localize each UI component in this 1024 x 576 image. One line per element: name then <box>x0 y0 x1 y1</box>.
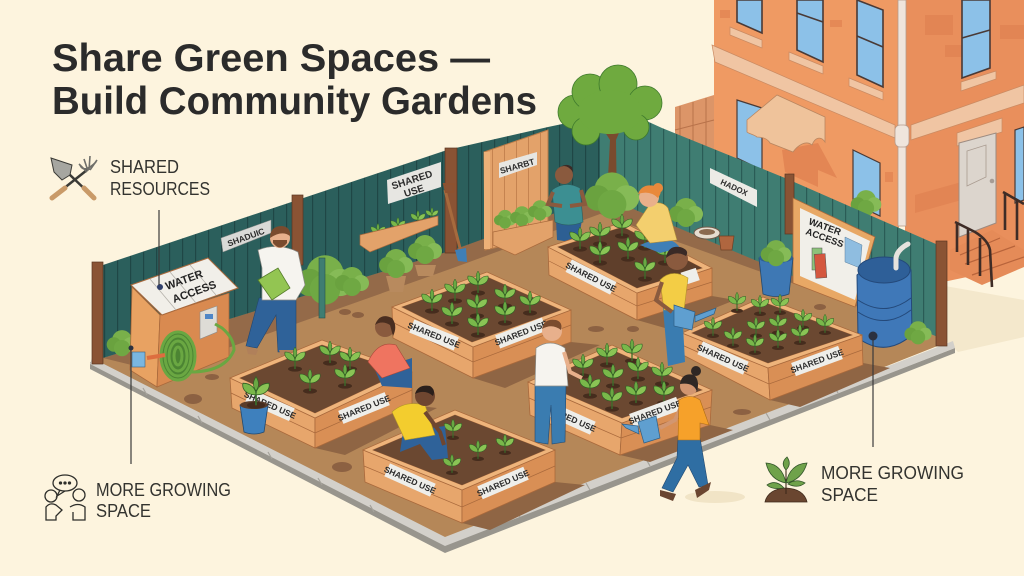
shed right wall <box>157 293 229 387</box>
plants <box>285 347 305 372</box>
caption: shared resources: SHARED <box>110 157 179 177</box>
caption: more growing space left <box>96 480 231 521</box>
jeans <box>662 438 708 492</box>
person: man with bucket <box>246 226 305 356</box>
person: kneeling coral shirt <box>368 316 412 388</box>
large bush <box>296 255 369 305</box>
raised bed: top right <box>548 214 712 320</box>
plant beside barrel <box>904 321 932 344</box>
curb top <box>90 341 955 546</box>
label: SHARED USE <box>627 398 683 426</box>
tree trunk <box>596 112 627 216</box>
sign: shared use on fence: USE <box>403 183 426 200</box>
tap <box>132 352 165 367</box>
icon: trowel and fork <box>51 156 97 198</box>
plant in window <box>851 190 881 216</box>
person: walking orange tee <box>622 366 745 503</box>
shed left wall <box>130 287 160 387</box>
sign: shadufc on fence: SHADUIC <box>226 226 266 249</box>
caption: shared resources: RESOURCES <box>110 179 210 199</box>
leader lines <box>128 210 878 464</box>
caption: more growing space right: MORE GROWING <box>821 463 964 483</box>
title: Share Green Spaces — <box>52 37 490 80</box>
bushes behind bed <box>585 172 703 227</box>
label: SHARED USE <box>383 464 438 496</box>
garden ground <box>92 195 945 541</box>
bowl and pot <box>694 227 734 250</box>
rain barrel <box>857 244 912 347</box>
dark soil along fence base <box>103 195 945 372</box>
raised bed: bottom <box>363 410 555 523</box>
lower windows <box>737 100 1024 216</box>
hose reel <box>161 324 234 380</box>
shed bush <box>107 330 137 356</box>
water access shed <box>107 258 238 387</box>
label: SHARED USE <box>789 347 845 375</box>
brick facade: right <box>905 0 1024 290</box>
tree canopy <box>558 65 662 145</box>
green bucket <box>258 268 290 300</box>
plants <box>573 354 593 379</box>
upper windows <box>737 0 990 87</box>
building ground shadow <box>945 286 1024 352</box>
label: SHARED USE <box>543 402 598 434</box>
shoes <box>660 482 711 501</box>
label: SHARED USE <box>406 320 462 350</box>
raised bed: top middle <box>392 271 571 378</box>
sign: shared use on fence <box>387 162 441 204</box>
leader: more growing space left <box>128 346 134 464</box>
steps <box>950 230 1024 285</box>
sign: shadufc on fence <box>221 220 271 252</box>
notice board: ACCESS <box>804 226 845 250</box>
label <box>681 268 700 285</box>
bed shadows <box>315 296 890 530</box>
tap post <box>319 258 325 318</box>
title: Build Community Gardens <box>52 80 537 123</box>
stair rails <box>955 192 1024 287</box>
title <box>52 37 537 123</box>
door <box>957 118 1002 237</box>
wooden gate panel <box>484 130 548 250</box>
notice board <box>793 198 875 307</box>
curb <box>90 341 955 553</box>
walker shadow <box>685 491 745 503</box>
awning <box>747 95 825 152</box>
water access shed: ACCESS <box>171 279 218 306</box>
label: SHARED USE <box>243 389 298 421</box>
blue pot with seedling <box>240 377 269 434</box>
planter at gate <box>493 200 553 255</box>
wooden gate panel: SHARBT <box>499 156 536 176</box>
cornice band right <box>911 85 1024 140</box>
raised bed: center right <box>528 339 712 455</box>
potted shrubs <box>379 235 442 292</box>
plants <box>422 289 442 314</box>
head <box>680 377 698 395</box>
label: SHARED USE <box>336 393 392 423</box>
person: teal shirt <box>548 165 585 243</box>
sign: hadox <box>710 168 757 207</box>
wall planter <box>360 207 438 252</box>
leader: shared resources <box>158 210 160 285</box>
sign: sharbt <box>499 152 537 178</box>
plants <box>444 419 462 440</box>
person: yellow top with watering can <box>656 247 716 366</box>
label: SHARED USE <box>475 467 531 498</box>
watering can <box>674 305 716 330</box>
shed roof <box>131 258 238 315</box>
roof text: WATER <box>164 268 205 293</box>
leader: more growing space right <box>868 332 878 447</box>
fence: back left <box>103 115 605 358</box>
cornice band <box>712 45 895 138</box>
awning shadow <box>782 143 837 187</box>
arm <box>660 405 682 428</box>
fence: back right <box>600 100 945 340</box>
person: white shirt man <box>535 320 582 444</box>
caption: more growing space left: SPACE <box>96 501 151 521</box>
downpipe <box>895 0 909 226</box>
caption: more growing space right <box>821 463 964 505</box>
shovel <box>444 184 467 262</box>
label: SHARED USE <box>493 318 549 348</box>
dirt clods <box>184 304 826 472</box>
watering can <box>622 416 660 443</box>
caption: more growing space left: MORE GROWING <box>96 480 231 500</box>
icon: people talking <box>45 475 85 520</box>
label: SHARED USE <box>696 342 751 374</box>
fence posts <box>92 148 947 364</box>
caption: more growing space right: SPACE <box>821 485 878 505</box>
sign: hadox: HADOX <box>719 178 750 198</box>
plants <box>704 317 722 338</box>
brick facade: left <box>714 0 899 240</box>
notice board: WATER <box>807 216 842 238</box>
building <box>712 0 1024 352</box>
blue planter with plant <box>759 240 793 296</box>
person: yellow shirt kneeling <box>392 386 448 460</box>
icon: sprout <box>765 457 807 502</box>
caption: shared resources <box>110 157 210 199</box>
curb side <box>90 348 955 553</box>
brick patches <box>720 10 1024 213</box>
label: SHARED USE <box>564 260 618 294</box>
tree <box>558 65 662 216</box>
raised bed: left <box>230 340 412 448</box>
person: orange hair gardener <box>636 183 680 253</box>
raised bed: right <box>682 292 863 400</box>
window sills <box>730 27 996 100</box>
small wood fence beside building <box>675 95 714 160</box>
meter panel <box>200 306 217 339</box>
plants <box>570 227 590 252</box>
shirt <box>678 396 709 440</box>
sign: shared use on fence: SHARED <box>390 169 434 192</box>
